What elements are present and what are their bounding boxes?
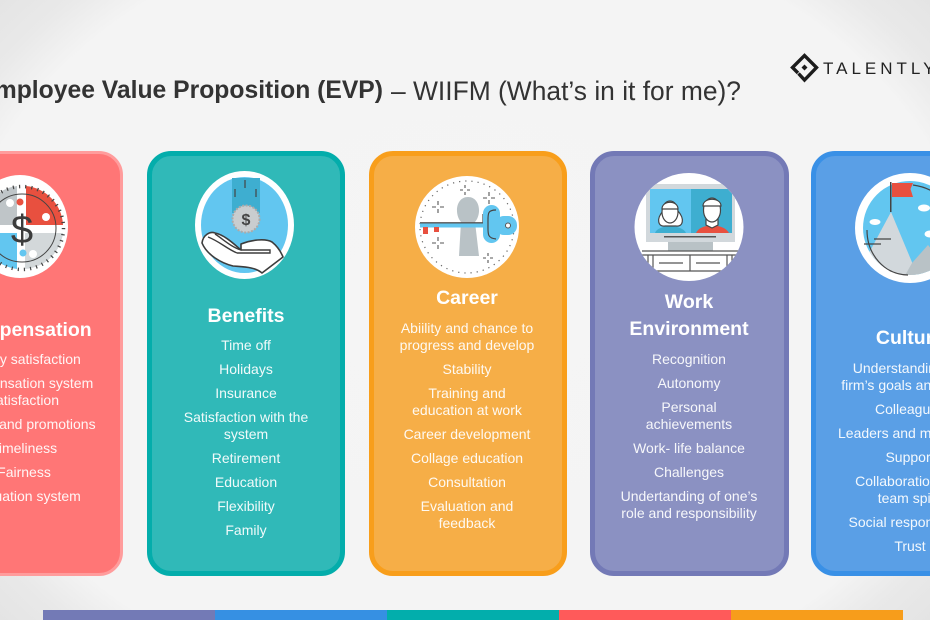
list: career items: education at work xyxy=(412,402,522,418)
list: culture items xyxy=(838,360,930,554)
heading: career: Career xyxy=(436,287,498,309)
list: work environment items xyxy=(621,351,757,521)
list: benefits items: Retirement xyxy=(212,450,280,466)
list: career items: Abiility and chance to xyxy=(401,320,533,336)
icon: puzzle stopwatch with dollar: $ xyxy=(11,208,33,252)
panel: career xyxy=(369,151,567,576)
list: work environment items: Recognition xyxy=(652,351,726,367)
list: career items: progress and develop xyxy=(400,337,534,353)
list: work environment items: role and responsibility xyxy=(621,505,757,521)
logo: TalentLyft xyxy=(790,53,930,82)
title: regular part: – WIIFM (What’s in it for me)? xyxy=(391,76,741,106)
list: career items: Training and xyxy=(428,385,506,401)
list: benefits items: Family xyxy=(225,522,267,538)
heading: benefits: Benefits xyxy=(208,305,284,327)
list: work environment items: Undertanding of one’s xyxy=(621,488,757,504)
list: benefits items xyxy=(184,337,308,538)
list: culture items: Trust xyxy=(894,538,926,554)
icon: hand with coin: $ xyxy=(242,212,251,229)
list: career items xyxy=(400,320,534,531)
list: benefits items: Holidays xyxy=(219,361,273,377)
panel: culture xyxy=(811,151,930,576)
list: work environment items: Personal xyxy=(661,399,717,415)
panel: work environment xyxy=(590,151,789,576)
list: career items: Stability xyxy=(442,361,492,377)
list: work environment items: Autonomy xyxy=(657,375,721,391)
list: work environment items: Work- life balance xyxy=(633,440,745,456)
list: benefits items: Insurance xyxy=(215,385,277,401)
list: work environment items: Challenges xyxy=(654,464,724,480)
list: benefits items: Time off xyxy=(221,337,271,353)
title xyxy=(0,76,741,106)
icon: hand with coin xyxy=(195,171,294,279)
icon: mountain with flag xyxy=(855,173,930,283)
list: career items: feedback xyxy=(439,515,495,531)
icon: video call monitor xyxy=(634,173,744,281)
logo mark xyxy=(790,53,819,82)
list: career items: Consultation xyxy=(428,474,506,490)
list: career items: Evaluation and xyxy=(421,498,513,514)
heading: work environment: Environment xyxy=(629,318,749,340)
list: benefits items: Flexibility xyxy=(217,498,275,514)
footer colour bar xyxy=(43,610,903,620)
icon: puzzle stopwatch with dollar xyxy=(0,175,68,278)
heading: work environment: Work xyxy=(665,291,713,313)
list: benefits items: system xyxy=(224,426,268,442)
list: benefits items: Education xyxy=(215,474,277,490)
list: work environment items: achievements xyxy=(646,416,732,432)
heading: work environment xyxy=(629,291,749,340)
panel: benefits xyxy=(147,151,345,576)
list: benefits items: Satisfaction with the xyxy=(184,409,308,425)
list: career items: Collage education xyxy=(411,450,523,466)
panel: compensation xyxy=(0,151,123,576)
list: compensation items xyxy=(0,351,96,504)
list: career items: Career development xyxy=(404,426,530,442)
icon: key and keyhole xyxy=(415,176,519,278)
